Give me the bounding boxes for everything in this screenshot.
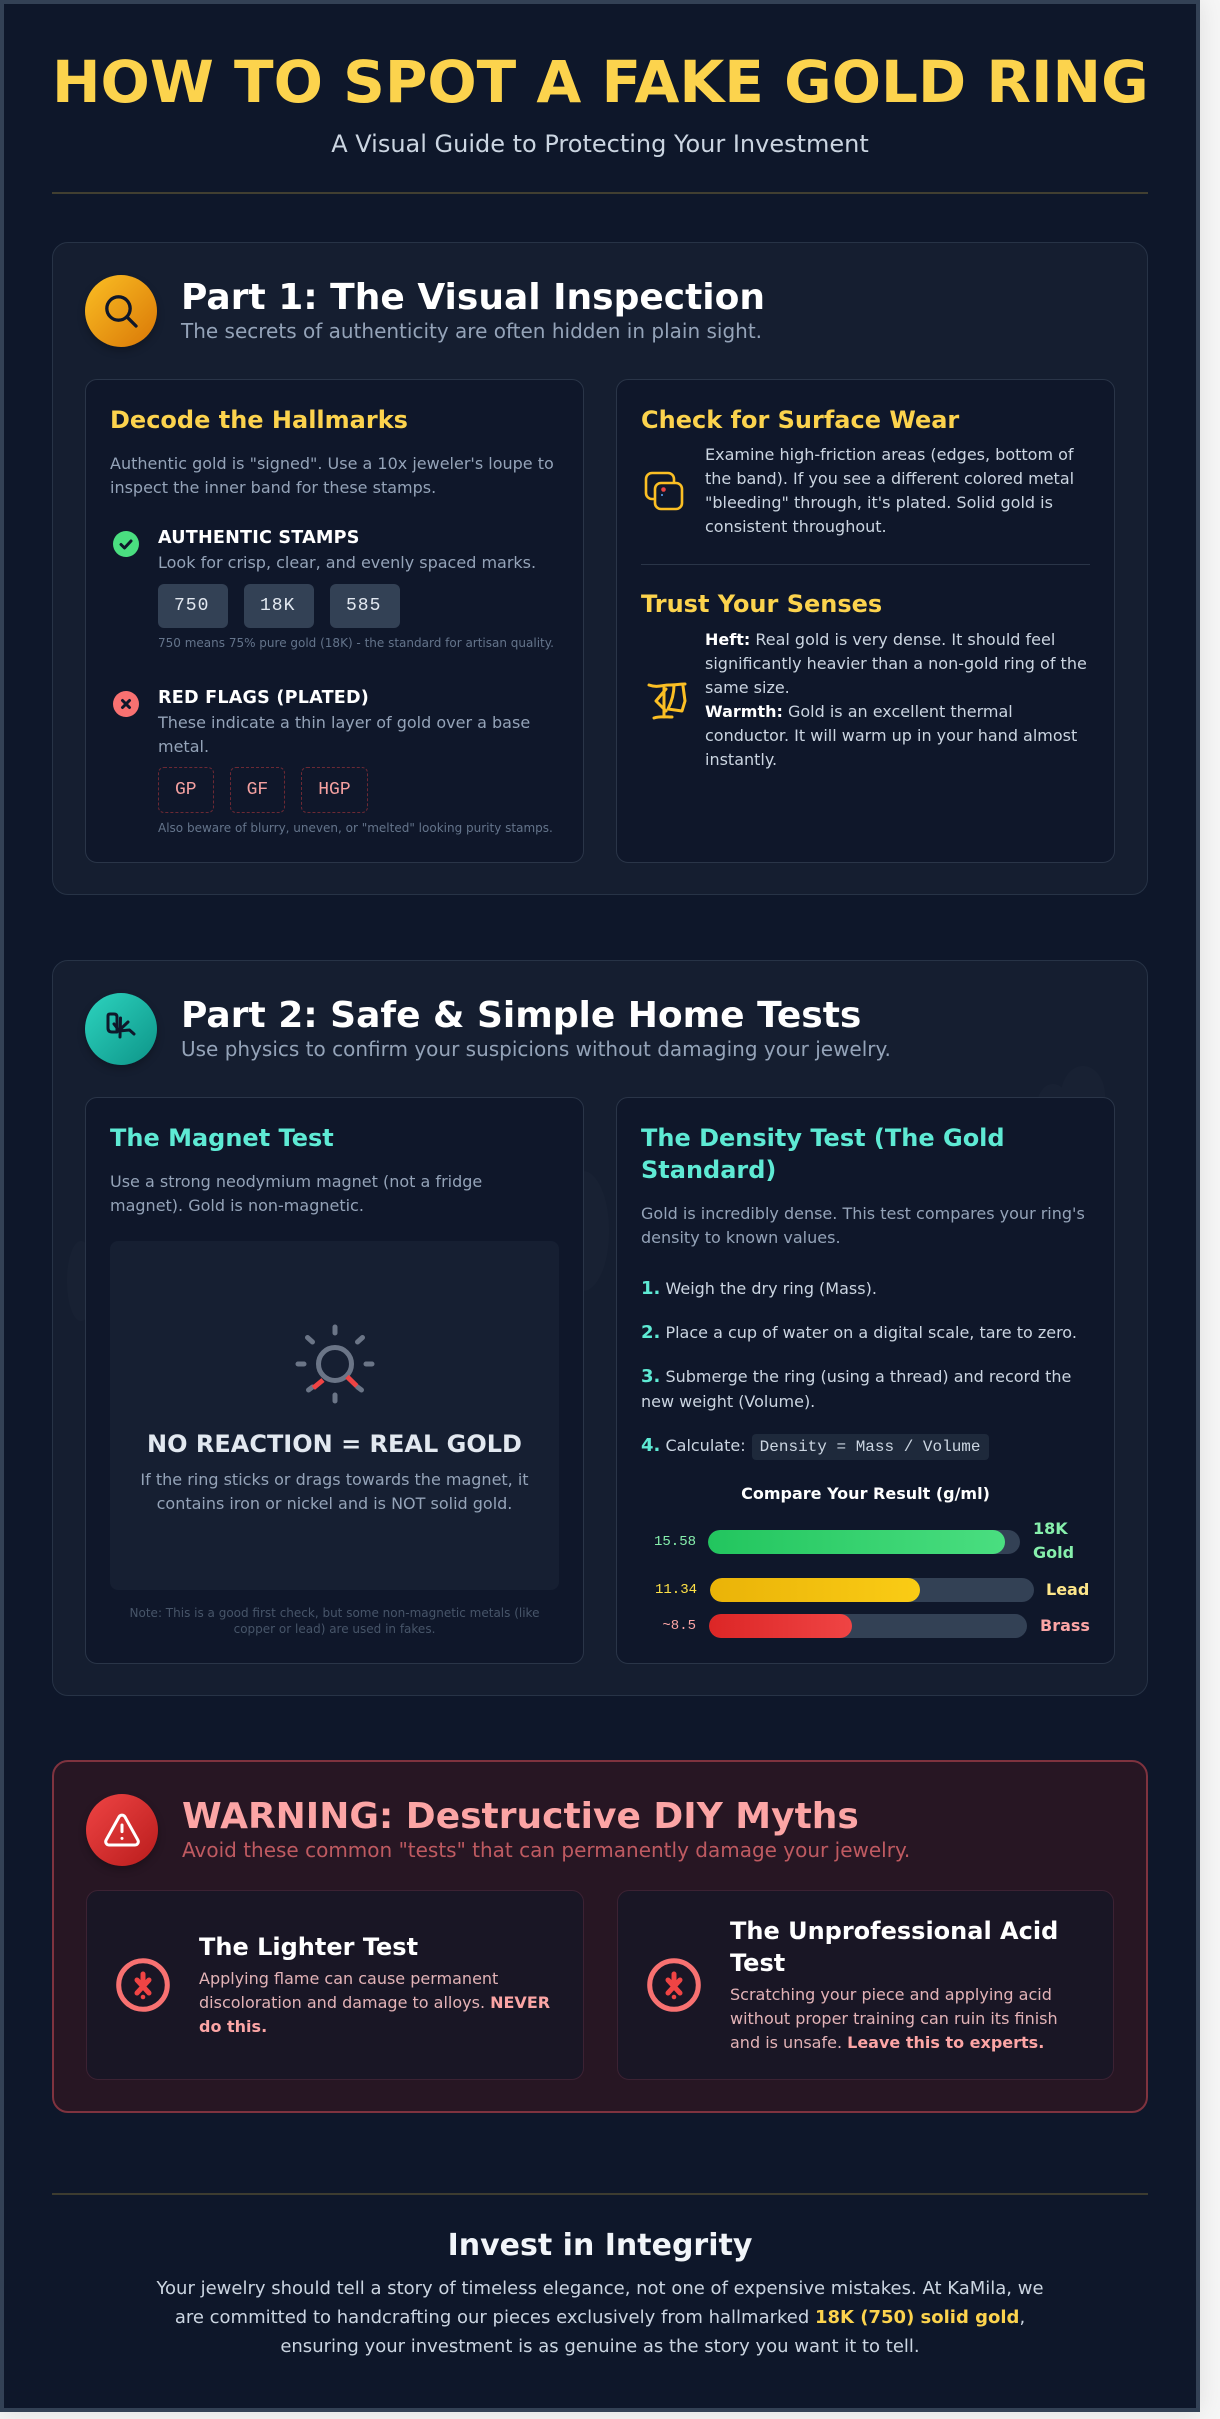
icon: warning triangle (86, 1794, 158, 1866)
myth card: acid test: The Unprofessional Acid Test (730, 1917, 1058, 1977)
red flags (113, 688, 553, 835)
authentic stamps: Look for crisp, clear, and evenly spaced marks. (158, 553, 536, 572)
authentic stamps (113, 528, 554, 650)
magnet result panel: If the ring sticks or drags towards the magnet, it contains iron or nickel and is NOT solid gold. (140, 1470, 529, 1513)
magnet note: Note: This is a good first check, but some non-magnetic metals (like copper or lead) are used in fakes. (130, 1606, 539, 1636)
authentic stamp tags (158, 584, 400, 628)
part 2 heading: Part 2: Safe & Simple Home Tests (181, 995, 861, 1036)
surface wear text with icon: Examine high-friction areas (edges, bottom of the band). If you see a different colored metal "bleeding" through, it's plated. Solid gold is consistent throughout. (705, 445, 1074, 536)
authentic stamps: 750 means 75% pure gold (18K) - the standard for artisan quality. (158, 636, 554, 650)
subtitle: A Visual Guide to Protecting Your Investment (331, 130, 869, 158)
part 1 heading: The secrets of authenticity are often hidden in plain sight. (181, 319, 762, 343)
footer heading: Invest in Integrity (448, 2228, 752, 2263)
card: decode the hallmarks (85, 379, 584, 863)
card: surface wear and senses: Check for Surface Wear (641, 406, 959, 434)
bar chart: density comparison: 18K (1033, 1519, 1068, 1538)
icon: red cross (113, 691, 139, 717)
bar chart: density comparison (654, 1484, 1090, 1638)
icon: magnifying glass (85, 275, 157, 347)
bar chart: density comparison: Compare Your Result (g/ml) (741, 1484, 990, 1503)
density steps: 3. Submerge the ring (using a thread) and record the new weight (Volume). (641, 1366, 1071, 1411)
bar chart: density comparison: ~8.5 (662, 1618, 696, 1634)
red flags: RED FLAGS (PLATED) (158, 688, 369, 708)
senses text with icon (647, 630, 1087, 769)
footer text: Your jewelry should tell a story of timeless elegance, not one of expensive mistakes. At KaMila, we are committed to handcrafting our pieces exclusively from hallmarked 18K (750) solid gold, ensuring your investment is as genuine as the story you want it to tell. (156, 2278, 1044, 2357)
card: surface wear and senses: Trust Your Senses (641, 590, 882, 618)
myth card: lighter test (86, 1890, 584, 2080)
magnet result panel (110, 1241, 559, 1590)
card: density test: Gold is incredibly dense. This test compares your ring's density to known values. (641, 1204, 1085, 1247)
density steps: 4. Calculate: Density = Mass / Volume (641, 1435, 981, 1456)
authentic stamp tags: 750 (174, 596, 209, 616)
senses text with icon: Heft: Real gold is very dense. It should feel significantly heavier than a non-gold ring of the same size. (705, 630, 1087, 697)
panel: warning myths (52, 1760, 1148, 2113)
authentic stamp tags: 585 (346, 596, 381, 616)
red flags: These indicate a thin layer of gold over a base metal. (158, 713, 530, 756)
warning heading (86, 1794, 910, 1866)
title: HOW TO SPOT A FAKE GOLD RING (52, 48, 1149, 116)
card: decode the hallmarks: Decode the Hallmarks (110, 406, 408, 434)
red flags: Also beware of blurry, uneven, or "melted" looking purity stamps. (158, 821, 553, 835)
myth card: acid test: Scratching your piece and applying acid without proper training can ruin its finish and is unsafe. Leave this to experts. (730, 1985, 1058, 2052)
card: density test: The Density Test (The Gold Standard) (641, 1124, 1005, 1184)
icon: prohibited acid (647, 1958, 701, 2012)
part 1 heading: Part 1: The Visual Inspection (181, 277, 765, 318)
card: magnet test: Use a strong neodymium magnet (not a fridge magnet). Gold is non-magnetic. (110, 1172, 482, 1215)
part 2 heading (85, 993, 891, 1067)
myth card: lighter test: The Lighter Test (199, 1933, 418, 1961)
card: decode the hallmarks: Authentic gold is "signed". Use a 10x jeweler's loupe to inspect the inner band for these stamps. (110, 454, 554, 497)
bar chart: density comparison: 11.34 (655, 1582, 697, 1598)
panel: part 2 home tests (52, 960, 1148, 1696)
icon: hand and magnet (85, 993, 157, 1065)
bar chart: density comparison: Gold (1033, 1543, 1074, 1562)
red flag tags (158, 767, 368, 813)
icon: green check (113, 531, 139, 557)
warning heading: WARNING: Destructive DIY Myths (182, 1796, 859, 1837)
red flag tags: GF (247, 780, 268, 800)
density steps: 1. Weigh the dry ring (Mass). (641, 1278, 877, 1299)
red flag tags: HGP (318, 780, 351, 800)
card: magnet test (85, 1097, 584, 1664)
icon: prohibited flame (116, 1958, 170, 2012)
part 2 heading: Use physics to confirm your suspicions without damaging your jewelry. (181, 1037, 891, 1061)
header (52, 48, 1148, 194)
bar chart: density comparison: 15.58 (654, 1534, 696, 1550)
authentic stamp tags: 18K (260, 596, 295, 616)
icon: overlapping squares (644, 472, 684, 510)
authentic stamps: AUTHENTIC STAMPS (158, 528, 360, 548)
myth card: acid test (617, 1890, 1114, 2080)
myth card: lighter test: Applying flame can cause permanent discoloration and damage to alloys. NEVER do this. (199, 1969, 550, 2036)
red flag tags: GP (175, 780, 197, 800)
density steps (641, 1278, 1077, 1460)
part 1 heading (85, 275, 765, 349)
magnet result panel: NO REACTION = REAL GOLD (147, 1430, 522, 1458)
panel: part 1 visual inspection (52, 242, 1148, 895)
bar chart: density comparison: Lead (1046, 1580, 1089, 1599)
density steps: 2. Place a cup of water on a digital scale, tare to zero. (641, 1322, 1077, 1343)
icon: balance scale (647, 682, 686, 720)
warning heading: Avoid these common "tests" that can permanently damage your jewelry. (182, 1838, 910, 1862)
footer (52, 2193, 1148, 2361)
card: magnet test: The Magnet Test (110, 1124, 334, 1152)
senses text with icon: Warmth: Gold is an excellent thermal conductor. It will warm up in your hand almost instantly. (705, 702, 1077, 769)
card: surface wear and senses (616, 379, 1115, 863)
card: density test (616, 1097, 1115, 1664)
bar chart: density comparison: Brass (1040, 1616, 1090, 1635)
icon: ring with magnetic rays (296, 1324, 374, 1404)
